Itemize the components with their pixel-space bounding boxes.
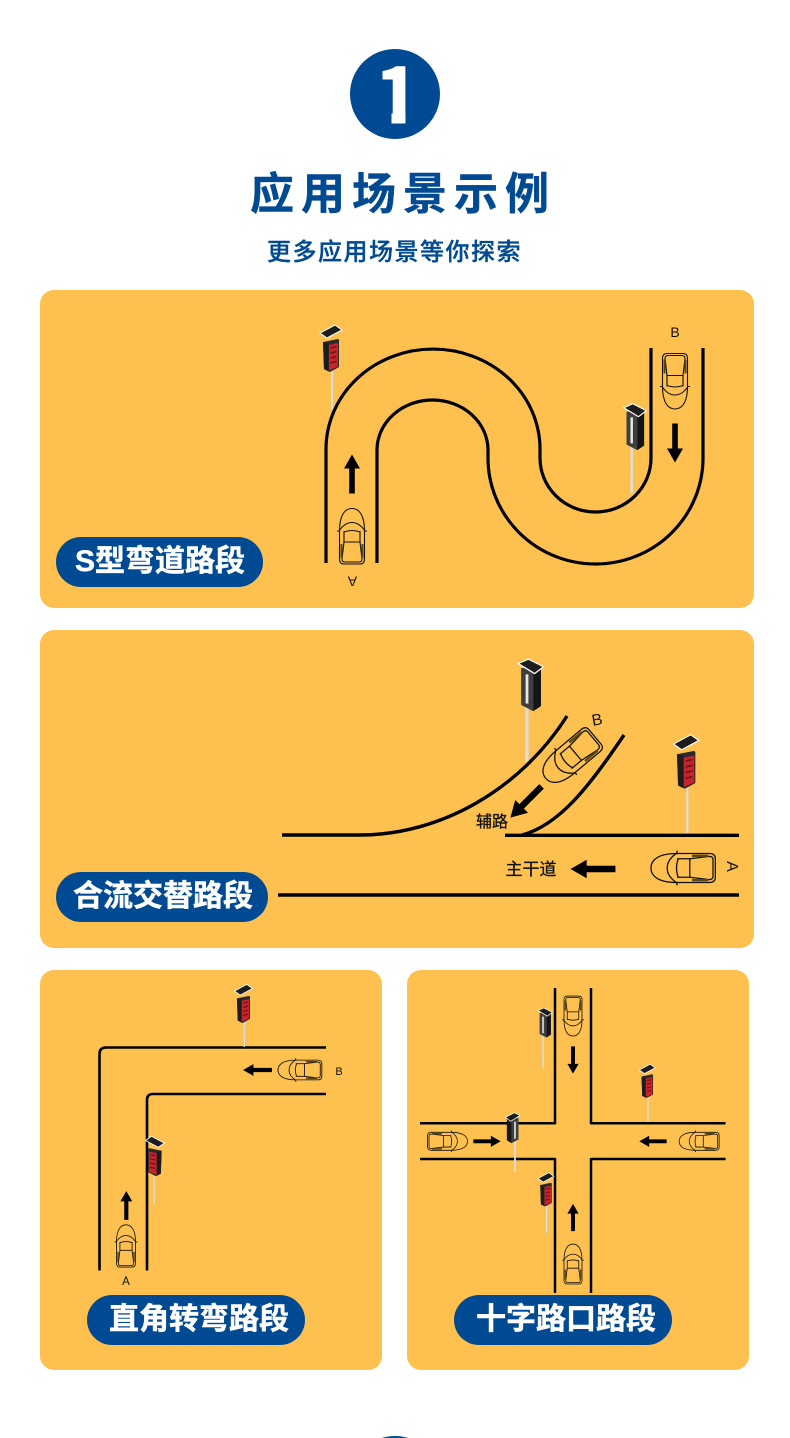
road lines: merge [278,716,739,895]
panel: S-curve road [40,290,754,608]
arrow left [639,1136,667,1147]
pill: right angle [87,1295,305,1345]
arrow right [473,1136,501,1147]
sign: front [674,735,699,833]
header badge: number 1: 1 [375,36,420,146]
road lines: S curve [326,348,703,564]
pill: S curve: S型弯道路段 [75,545,245,578]
sign: left [146,1136,164,1205]
title: 应用场景示例 [250,170,556,219]
car B [278,1058,322,1082]
arrow up [344,454,360,494]
header badge: number 1 [350,49,440,139]
label B: B [670,324,680,340]
panel: crossroad [407,970,749,1370]
car bottom [562,1244,584,1284]
panel: merge road [40,630,754,948]
road lines: crossroad [420,988,726,1293]
sign: back [624,404,646,493]
label B: B [335,1066,343,1078]
label main road: 主干道 [506,860,556,879]
pill: crossroad [454,1295,672,1345]
sign: back [518,659,544,762]
label B: B [591,711,604,730]
next section badge (cropped) [382,1436,408,1438]
car top [562,996,584,1036]
sign: top-right front [639,1064,655,1122]
pill: merge [56,872,268,922]
label A: A [723,861,740,872]
sign: bottom-left front [538,1173,554,1233]
car B [660,354,690,409]
sign: top [234,984,252,1047]
arrow merge [504,780,548,824]
arrow left [243,1064,272,1076]
label A: A [122,1276,130,1288]
car A [651,851,715,885]
arrow down [667,424,683,462]
road lines: right angle [100,1048,326,1270]
arrow up [120,1191,132,1220]
arrow down [567,1046,579,1074]
car left [428,1130,468,1152]
panel: right-angle road [40,970,382,1370]
subtitle: 更多应用场景等你探索 [267,239,522,266]
pill: S curve [56,537,263,587]
pill: merge: 合流交替路段 [73,880,253,913]
car A [115,1225,137,1267]
sign: top-left back [538,1008,552,1068]
sign: front [320,325,342,409]
arrow up [567,1204,579,1231]
arrow left [571,860,615,878]
pill: crossroad: 十字路口路段 [476,1303,656,1336]
pill: right angle: 直角转弯路段 [109,1303,289,1336]
car B [534,724,606,792]
label A: A [347,574,357,590]
label side road: 辅路 [476,813,508,831]
sign: centre-left back [505,1113,520,1172]
car right [679,1130,719,1152]
car A [337,508,367,564]
